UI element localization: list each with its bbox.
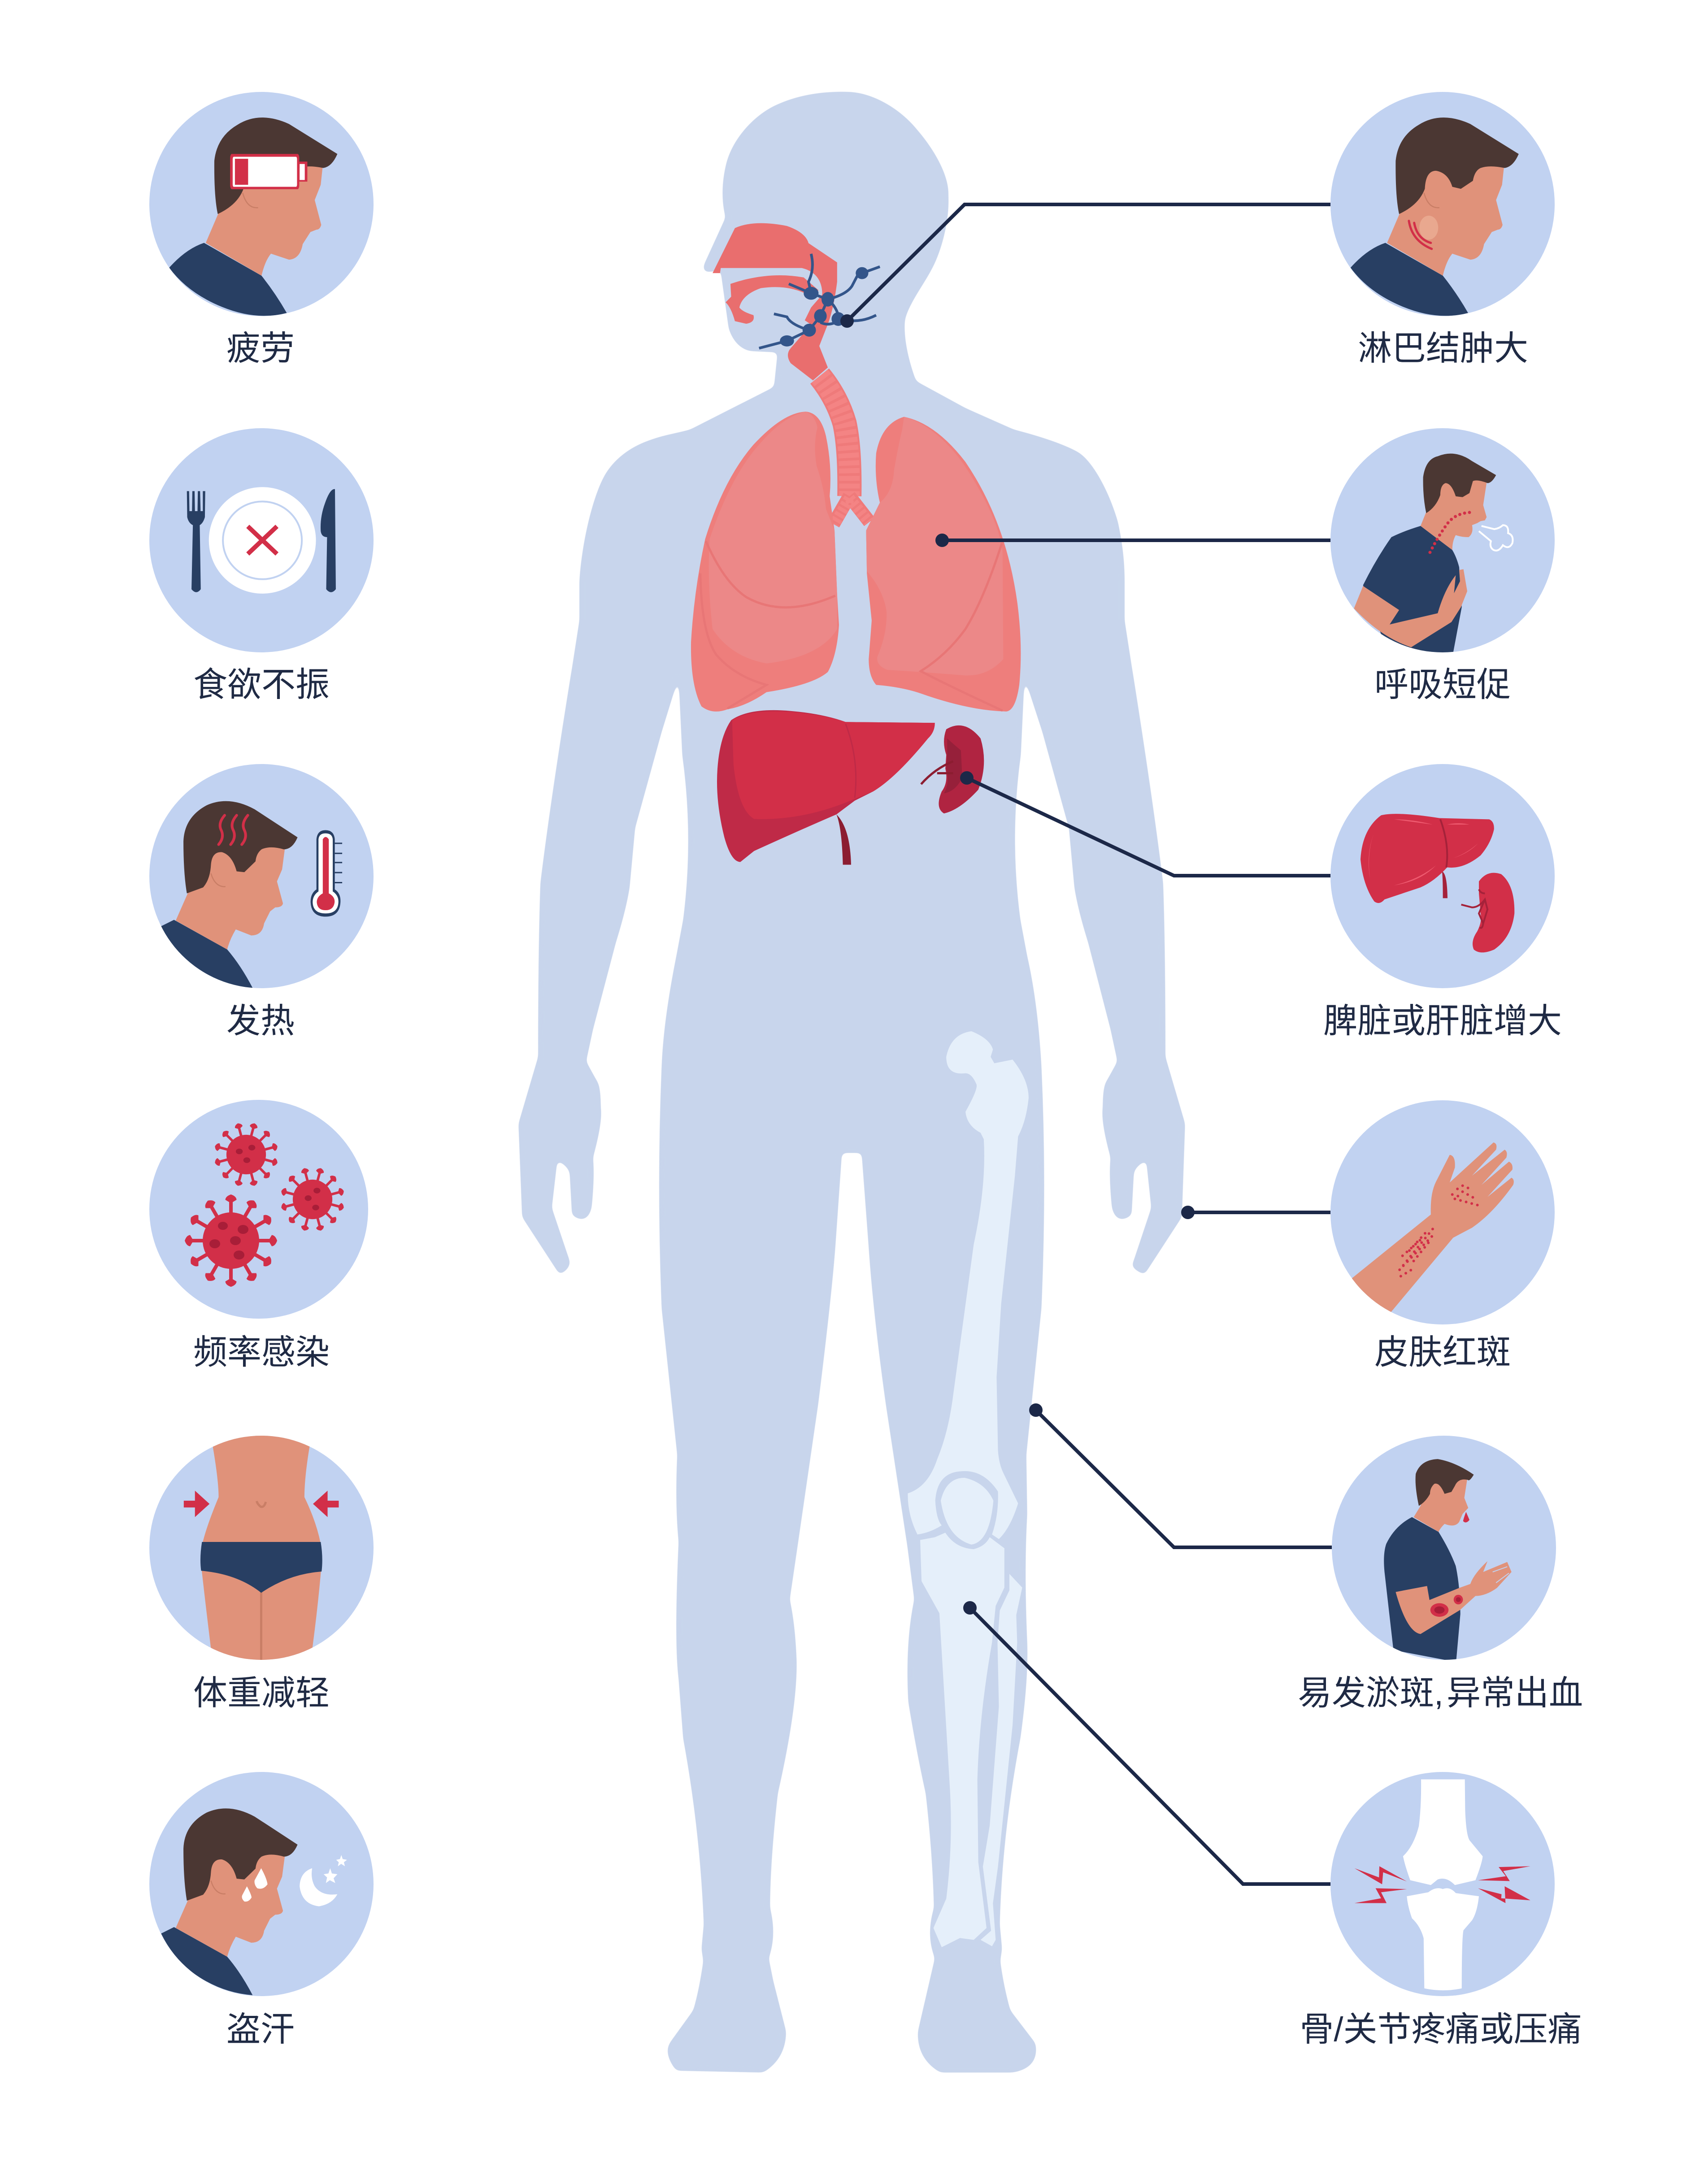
virus: right [273, 1160, 352, 1239]
icon: thermometer [311, 830, 342, 916]
icon: fatigue circle [149, 92, 374, 316]
mouth cavity [726, 275, 818, 324]
label: 发热 [226, 1002, 295, 1040]
patella [941, 1478, 993, 1545]
icon: weight loss circle [149, 1436, 374, 1660]
icon: infections circle [149, 1100, 368, 1319]
liver, gallbladder vessel and spleen [717, 710, 984, 865]
panel: enlarged spleen or liver [1323, 764, 1562, 1040]
icon: viruses [185, 1115, 352, 1287]
icon: night sweats circle [149, 1772, 374, 1996]
icon: breath circle [1330, 428, 1555, 652]
label: 盗汗 [226, 2010, 295, 2049]
icon: arm with rash [1345, 1142, 1514, 1320]
label: 脾脏或肝脏增大 [1323, 1002, 1562, 1040]
panel: fever [149, 764, 374, 1040]
connector: bruising [1036, 1410, 1332, 1547]
spleen [939, 725, 984, 813]
icon: lymph circle [1330, 92, 1555, 316]
panel: loss of appetite [149, 428, 374, 704]
icon: fever circle [149, 764, 374, 988]
label: 体重减轻 [193, 1674, 330, 1712]
fibula [981, 1574, 1022, 1946]
label: 皮肤红斑 [1374, 1333, 1511, 1372]
icon: person with nosebleed and bruises [1384, 1459, 1512, 1662]
virus: top [207, 1115, 286, 1194]
left lung [691, 412, 839, 712]
virus: bottom [185, 1194, 277, 1287]
label: 易发淤斑,异常出血 [1298, 1674, 1583, 1712]
low battery [230, 154, 307, 189]
panel: fatigue [149, 92, 374, 368]
nasal cavity and throat [713, 223, 837, 380]
icon: head with swollen neck [1351, 117, 1519, 316]
panel: bruising and bleeding [1298, 1436, 1583, 1712]
icon: head with heat waves [161, 801, 298, 988]
panel: shortness of breath [1330, 428, 1555, 704]
right lung [866, 417, 1021, 712]
femur [908, 1031, 1029, 1539]
human body silhouette [518, 92, 1185, 2072]
connector: skin [1188, 1211, 1330, 1214]
label: 呼吸短促 [1374, 666, 1511, 704]
liver vessel [836, 814, 851, 865]
label: 骨/关节疼痛或压痛 [1300, 2010, 1582, 2049]
panel: frequent infections [149, 1100, 368, 1372]
panel: bone and joint pain [1300, 1772, 1582, 2049]
connector: lymph nodes [847, 204, 1330, 321]
icon: plate and cutlery [187, 487, 336, 594]
icon: head with sweat and moon [161, 1808, 347, 1995]
respiratory organs: airway and lungs [691, 223, 1021, 712]
label: 频率感染 [193, 1333, 330, 1372]
panel: skin rash [1330, 1100, 1555, 1372]
icon: person coughing [1354, 454, 1513, 657]
leg bones [908, 1031, 1029, 1947]
icon: head with low battery [169, 117, 337, 316]
label: 疲劳 [226, 330, 295, 368]
icon: knee joint with pain bolts [1355, 1780, 1530, 1990]
icon: liver and spleen [1361, 814, 1514, 952]
panel: weight loss [149, 1434, 374, 1712]
label: 淋巴结肿大 [1358, 330, 1528, 368]
trachea [820, 376, 869, 524]
panel: night sweats [149, 1772, 374, 2049]
liver [717, 710, 935, 862]
icon: rash circle [1330, 1100, 1555, 1324]
connector: spleen [967, 778, 1330, 876]
lymph nodes [759, 254, 880, 348]
icon: organ circle [1330, 764, 1555, 988]
icon: waist with arrows [184, 1434, 339, 1666]
icon: appetite circle [149, 428, 374, 652]
panel: swollen lymph nodes [1330, 92, 1555, 368]
connector: bone [970, 1608, 1330, 1884]
icon: joint circle [1330, 1772, 1555, 1996]
connector: lungs [942, 538, 1330, 542]
tibia [920, 1533, 1004, 1947]
label: 食欲不振 [193, 666, 330, 704]
anchor dots [840, 314, 1195, 1615]
connector lines with anchor dots [840, 204, 1332, 1884]
icon: bruising circle [1332, 1436, 1556, 1660]
